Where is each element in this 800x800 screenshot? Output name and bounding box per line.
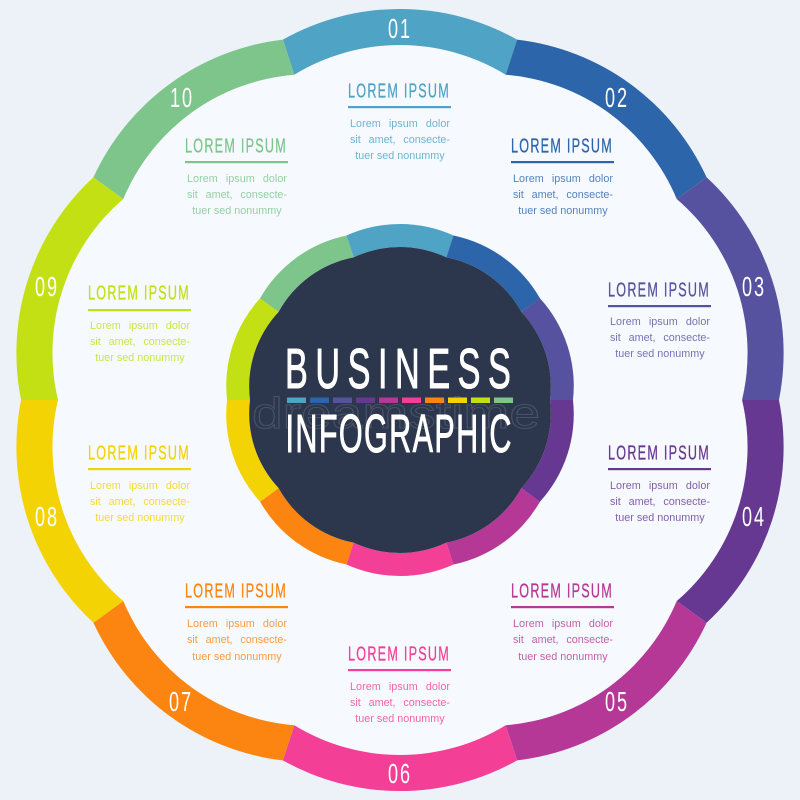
segment 09: 09 [35,271,59,302]
text block 06 [348,643,451,725]
text block 05: tuer sed nonummy [518,651,608,663]
text block 03 [608,279,711,360]
segment 09 [0,168,127,411]
segment 01 [283,9,517,75]
text block 04: tuer sed nonummy [615,512,705,524]
text block 01: Lorem ipsum dolor [350,118,450,130]
text block 03: tuer sed nonummy [615,348,705,360]
segment 05: 05 [605,686,629,717]
text block 05: Lorem ipsum dolor [513,618,613,630]
inner scalloped panel [52,45,748,755]
segment 04: 04 [742,501,766,532]
segment 07: 07 [169,686,193,717]
text block 08: LOREM IPSUM [88,442,190,464]
segment 08: 08 [35,501,59,532]
text block 05 [511,580,614,663]
segment 02 [496,15,725,206]
text block 03: LOREM IPSUM [608,279,710,301]
text block 10 [185,135,288,217]
text block 07 [185,580,288,663]
text block 02: tuer sed nonummy [518,205,608,217]
segment 07 [75,594,304,785]
watermark: dreamstime [252,389,540,438]
text block 07: sit amet, consecte- [187,634,287,646]
text block 05: sit amet, consecte- [513,634,613,646]
text block 06: Lorem ipsum dolor [350,681,450,693]
text block 04 [608,442,711,524]
text block 01: LOREM IPSUM [348,80,450,102]
central colored ring [216,224,584,576]
text block 06: LOREM IPSUM [348,643,450,665]
segment 01: 01 [388,13,412,44]
text block 02: LOREM IPSUM [511,135,613,157]
text block 04: Lorem ipsum dolor [610,480,710,492]
text block 08 [88,442,191,524]
segment 05 [496,594,725,785]
text block 10: LOREM IPSUM [185,135,287,157]
text block 07: Lorem ipsum dolor [187,618,287,630]
text block 03: Lorem ipsum dolor [610,316,710,328]
text block 08: tuer sed nonummy [95,512,185,524]
text block 07: LOREM IPSUM [185,580,287,602]
text block 09: Lorem ipsum dolor [90,320,190,332]
text block 07: tuer sed nonummy [192,651,282,663]
title: INFOGRAPHIC: INFOGRAPHIC [286,404,513,464]
text block 10: Lorem ipsum dolor [187,173,287,185]
text block 09: LOREM IPSUM [88,282,190,304]
text block 01: tuer sed nonummy [355,150,445,162]
text block 05: LOREM IPSUM [511,580,613,602]
color dashes [287,398,513,403]
segment 02: 02 [605,82,629,113]
title: BUSINESS: BUSINESS [285,336,518,400]
text block 01 [348,80,451,162]
text block 01: sit amet, consecte- [350,134,450,146]
text block 10: sit amet, consecte- [187,189,287,201]
segment 10: 10 [170,82,194,113]
text block 09 [88,282,191,364]
text block 09: tuer sed nonummy [95,352,185,364]
segment 06 [283,725,517,791]
segment 10 [75,15,304,206]
segment 04 [673,389,800,632]
text block 02: Lorem ipsum dolor [513,173,613,185]
text block 04: sit amet, consecte- [610,496,710,508]
text block 08: sit amet, consecte- [90,496,190,508]
segment 08 [0,389,127,632]
text block 10: tuer sed nonummy [192,205,282,217]
central dark badge [249,247,551,553]
segment 03 [673,168,800,411]
text block 04: LOREM IPSUM [608,442,710,464]
segment 03: 03 [742,271,766,302]
text block 09: sit amet, consecte- [90,336,190,348]
text block 08: Lorem ipsum dolor [90,480,190,492]
text block 06: tuer sed nonummy [355,713,445,725]
text block 02: sit amet, consecte- [513,189,613,201]
text block 03: sit amet, consecte- [610,332,710,344]
text block 02 [511,135,614,217]
text block 06: sit amet, consecte- [350,697,450,709]
segment 06: 06 [388,758,412,789]
